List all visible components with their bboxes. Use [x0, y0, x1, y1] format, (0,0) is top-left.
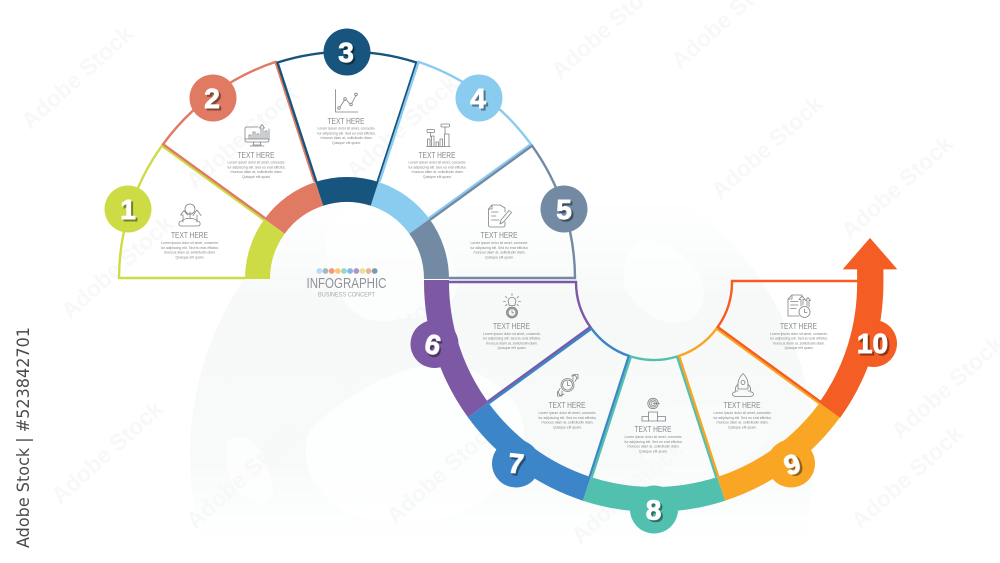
body text: Quisque elit quam.: [784, 345, 814, 350]
center title: infographic business concept: [306, 268, 387, 298]
panel outline: [489, 329, 629, 477]
icon: document and pencil: [488, 205, 512, 227]
step 2: [163, 62, 323, 234]
body text: tur adipiscing elit. Sed eu erat efficitur,: [470, 245, 528, 250]
body text: Quisque elit quam.: [553, 424, 582, 430]
body text: Quisque elit quam.: [332, 140, 361, 145]
step 4: [371, 62, 531, 234]
body text: [624, 434, 683, 454]
number: 8: [646, 494, 661, 526]
body text: tur adipiscing elit. Sed eu erat efficitur,: [408, 164, 466, 170]
heading: TEXT HERE: [780, 321, 817, 331]
body text: rhoncus diam at, sollicitudin diam.: [412, 169, 464, 174]
body text: Quisque elit quam.: [728, 424, 757, 430]
step 9: [679, 329, 840, 501]
body text: rhoncus diam at, sollicitudin diam.: [773, 340, 825, 346]
body text: rhoncus diam at, sollicitudin diam.: [542, 420, 594, 424]
body text: [228, 160, 286, 179]
background globe: [190, 142, 814, 550]
number badge: [104, 186, 152, 232]
band segment: [316, 177, 378, 206]
body text: tur adipiscing elit. Sed eu erat efficitur,: [228, 164, 286, 170]
step 6: [410, 280, 590, 417]
watermark: Adobe Stock: [46, 395, 168, 509]
body text: Lorem ipsum dolor sit amet, consecte-: [470, 240, 529, 245]
heading: TEXT HERE: [171, 230, 208, 240]
number badge: 1: [120, 194, 136, 225]
number badge: [324, 28, 370, 76]
watermark: Adobe Stock: [331, 280, 453, 394]
heading: TEXT HERE: [418, 150, 456, 160]
number badge circle: [492, 440, 540, 488]
watermark: Adobe Stock: [381, 415, 503, 529]
icon: light bulb and clock: [504, 294, 520, 318]
panel outline: [679, 329, 819, 477]
number badge circle: [410, 320, 458, 368]
band segment: [424, 280, 488, 417]
number badge: 3: [338, 37, 354, 68]
panel outline: [119, 146, 264, 278]
panel outline: [278, 52, 416, 182]
number badge circle: [850, 320, 897, 367]
subtitle: BUSINESS CONCEPT: [318, 292, 375, 298]
band segment: [371, 182, 430, 234]
body text: Lorem ipsum dolor sit amet, consecte-: [538, 410, 597, 415]
body text: rhoncus diam at, sollicitudin diam.: [474, 250, 526, 254]
color dots: [316, 268, 378, 274]
body text: Quisque elit quam.: [485, 254, 514, 260]
watermark: Adobe Stock: [566, 435, 688, 549]
watermark: Adobe Stock: [211, 270, 333, 384]
body text: Quisque elit quam.: [242, 174, 271, 179]
body text: [538, 410, 597, 430]
body text: Lorem ipsum dolor sit amet, consecte-: [408, 160, 467, 164]
arrow: band segment with head: [820, 238, 896, 417]
number badge: 5: [556, 194, 572, 225]
band segment: [264, 182, 323, 234]
body text: [408, 160, 467, 179]
number badge circle: [630, 486, 678, 534]
icon: people and arrows: [179, 204, 201, 226]
icon: document, clock and arrows: [788, 295, 810, 318]
number badge: [190, 74, 236, 122]
body text: Quisque elit quam.: [176, 254, 204, 260]
number: 6: [422, 328, 444, 361]
body text: tur adipiscing elit. Sed eu erat efficitur,: [770, 336, 828, 340]
watermark: Adobe Stock: [846, 420, 968, 534]
number badge: [540, 186, 588, 232]
heading: TEXT HERE: [328, 116, 365, 126]
watermark: Adobe Stock: [341, 70, 463, 184]
watermark: Adobe Stock: [181, 80, 303, 194]
body text: Quisque elit quam.: [498, 345, 526, 350]
body text: [161, 240, 220, 260]
band segment: [468, 402, 591, 501]
heading: TEXT HERE: [238, 150, 275, 160]
watermark: Adobe Stock: [16, 20, 138, 134]
body text: [770, 331, 829, 350]
body text: rhoncus diam at, sollicitudin diam.: [628, 444, 680, 448]
body text: tur adipiscing elit. Sed eu erat efficitur,: [318, 130, 376, 136]
panel outline: [449, 282, 590, 402]
panel outline: [592, 356, 716, 477]
body text: [470, 240, 529, 260]
icon: rocket and cloud: [733, 374, 753, 396]
watermark: Adobe Stock: [836, 130, 958, 244]
body text: [714, 410, 772, 430]
body text: Lorem ipsum dolor sit amet, consecte-: [714, 410, 772, 415]
body text: Quisque elit quam.: [423, 174, 452, 179]
body text: rhoncus diam at, sollicitudin diam.: [320, 135, 372, 140]
icon: clock with arrows: [558, 374, 578, 396]
band segment: [583, 477, 725, 512]
body text: tur adipiscing elit. Sed eu erat efficitur,: [483, 336, 541, 340]
body text: Lorem ipsum dolor sit amet, consecte-: [770, 331, 829, 336]
panel outline: [163, 62, 314, 218]
body text: tur adipiscing elit. Sed eu erat efficitur,: [538, 415, 596, 420]
icon: line chart: [336, 90, 358, 112]
band segment: [245, 219, 285, 279]
number: 9: [780, 447, 804, 482]
number: 7: [507, 447, 525, 480]
body text: Quisque elit quam.: [639, 448, 668, 454]
heading: TEXT HERE: [480, 230, 518, 240]
band segment: [717, 402, 840, 501]
body text: [318, 126, 376, 145]
watermark: Adobe Stock: [56, 210, 178, 324]
main title: INFOGRAPHIC: [306, 275, 387, 292]
body text: rhoncus diam at, sollicitudin diam.: [164, 250, 216, 254]
number badge: [456, 74, 502, 122]
number: 10: [857, 328, 888, 359]
watermark: Adobe Stock: [181, 420, 303, 534]
step 7: [468, 329, 629, 501]
band segment: [409, 219, 449, 279]
body text: Lorem ipsum dolor sit amet, consecte-: [624, 434, 683, 439]
number badge: 4: [470, 83, 486, 114]
heading: TEXT HERE: [634, 424, 672, 434]
panel outline: [380, 62, 531, 218]
heading: TEXT HERE: [724, 400, 761, 410]
step 5: [409, 146, 588, 279]
stock credit: Adobe Stock | #523842701: [14, 327, 34, 548]
icon: target on podium: [642, 398, 666, 421]
watermark: Adobe Stock: [706, 90, 828, 204]
body text: tur adipiscing elit. Sed eu erat efficitur,: [624, 439, 682, 444]
step 8: [583, 356, 725, 534]
number badge: 2: [204, 83, 220, 114]
body text: tur adipiscing elit. Sed eu erat efficitur,: [714, 415, 772, 420]
step 3: [278, 28, 416, 206]
heading: TEXT HERE: [493, 321, 530, 331]
panel outline: [718, 281, 858, 402]
panel outline: [430, 146, 575, 278]
step 10: [718, 238, 897, 417]
body text: tur adipiscing elit. Sed eu erat efficitur,: [161, 245, 219, 250]
body text: rhoncus diam at, sollicitudin diam.: [716, 420, 768, 424]
step 1: [104, 146, 285, 279]
body text: Lorem ipsum dolor sit amet, consecte-: [483, 331, 542, 336]
body text: [483, 331, 542, 350]
body text: rhoncus diam at, sollicitudin diam.: [486, 340, 538, 346]
body text: Lorem ipsum dolor sit amet, consecte-: [318, 126, 376, 130]
body text: Lorem ipsum dolor sit amet, consecte-: [161, 240, 220, 245]
icon: bars with labels: [426, 124, 450, 146]
body text: rhoncus diam at, sollicitudin diam.: [230, 169, 282, 174]
body text: Lorem ipsum dolor sit amet, consecte-: [228, 160, 286, 164]
icon: monitor with rising bars: [245, 124, 269, 146]
number badge circle: [767, 440, 815, 488]
heading: TEXT HERE: [548, 400, 586, 410]
